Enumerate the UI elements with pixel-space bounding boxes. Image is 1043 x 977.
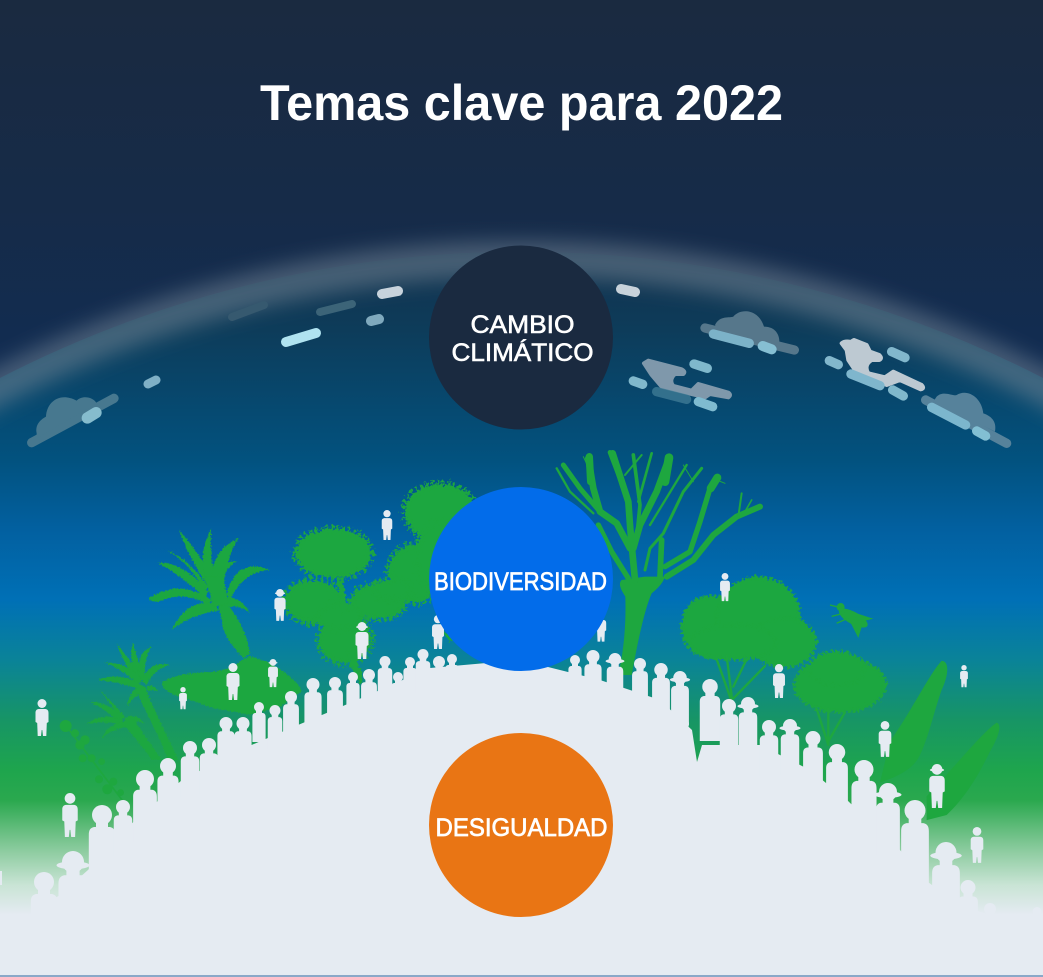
hill base [0, 660, 1043, 977]
title: Temas clave para 2022 [260, 75, 783, 131]
topic: biodiversidad [429, 487, 613, 671]
cloud: pale right [829, 340, 923, 396]
bottom edge line [0, 975, 1043, 977]
vine with round leaves [60, 720, 124, 802]
tall leaf shapes [880, 661, 999, 820]
topic: cambio climático: CLIMÁTICO [452, 338, 594, 367]
crowd hill [0, 649, 1043, 977]
atmosphere dome [0, 252, 1043, 977]
dashes: upper left [148, 289, 635, 384]
topic: cambio climático: CAMBIO [470, 311, 574, 339]
vegetation: bare branching tree [557, 452, 760, 675]
atmosphere glow band [0, 259, 1043, 402]
cloud: far right [926, 393, 1007, 443]
cloud: upper right [705, 311, 794, 350]
vegetation: right trees, insect and leaves [682, 578, 999, 820]
topic: desigualdad [429, 733, 613, 917]
small palm trees [86, 642, 178, 760]
topic: cambio climático [429, 246, 613, 430]
smaller round tree [795, 652, 885, 745]
scattered people [36, 510, 983, 863]
topic: biodiversidad: BIODIVERSIDAD [434, 568, 607, 596]
shrub cluster [285, 484, 475, 683]
clouds and emission dashes [32, 289, 1007, 443]
topic: desigualdad: DESIGUALDAD [436, 814, 608, 842]
crowd: right slope [568, 650, 1043, 951]
large round tree [682, 578, 815, 699]
crowd: left slope [0, 649, 459, 952]
cloud: centre right [633, 361, 730, 407]
vegetation: left palms, vine and shrubs [60, 484, 475, 802]
palm tree with island [148, 528, 302, 715]
insect [830, 603, 873, 638]
cloud: far left [32, 397, 114, 443]
